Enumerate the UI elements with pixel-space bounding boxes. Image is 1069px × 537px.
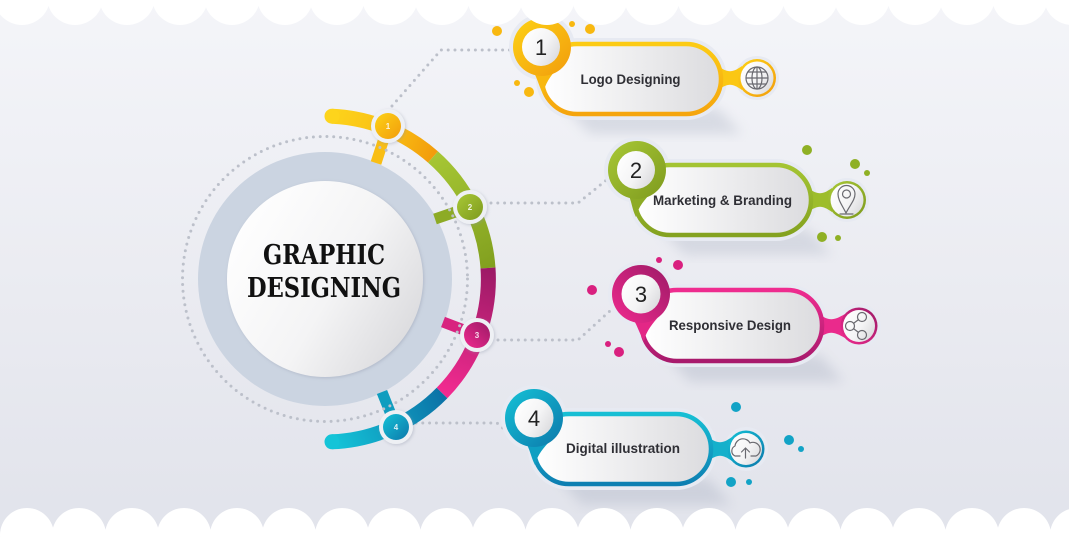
number badge xyxy=(505,389,563,447)
label: Marketing & Branding xyxy=(653,192,792,208)
bottom scalloped border xyxy=(0,508,1069,537)
number badge xyxy=(612,265,670,323)
node 3 xyxy=(460,318,494,352)
card shadow xyxy=(665,355,844,382)
card shadow xyxy=(660,229,832,255)
icon: share xyxy=(840,308,878,344)
badge tail xyxy=(626,191,653,217)
icon: map pin xyxy=(828,181,866,219)
card 3: responsive design: 3 xyxy=(635,282,647,307)
card 2: marketing and branding: 2 xyxy=(630,158,642,183)
node 4 xyxy=(379,410,413,444)
title: GRAPHIC xyxy=(263,240,385,271)
grey hub ring xyxy=(198,152,452,406)
badge tail xyxy=(531,68,558,94)
node 2: 2 xyxy=(468,203,473,212)
badge tail xyxy=(523,439,552,465)
number badge xyxy=(513,18,571,76)
label: Digital illustration xyxy=(566,440,680,456)
top scalloped border xyxy=(0,0,1069,25)
title: DESIGNING xyxy=(247,273,401,304)
card body xyxy=(635,165,811,235)
card body xyxy=(534,414,711,484)
card 3: responsive design xyxy=(587,257,881,382)
card 1: logo designing xyxy=(492,14,779,134)
label: Logo Designing xyxy=(580,71,680,87)
card 2: marketing and branding xyxy=(604,137,870,255)
card body xyxy=(542,44,721,114)
card 1: logo designing: 1 xyxy=(535,35,547,60)
node 3: 3 xyxy=(475,331,480,340)
card halo xyxy=(629,159,817,241)
card halo xyxy=(528,408,717,490)
connector to icon xyxy=(808,188,832,212)
badge tail xyxy=(630,315,660,341)
icon: globe xyxy=(738,59,776,97)
node 2 xyxy=(453,190,487,224)
node 4: 4 xyxy=(394,423,399,432)
title xyxy=(247,240,401,304)
accent dots xyxy=(587,257,683,357)
node 1 xyxy=(371,109,405,143)
central hub diagram xyxy=(182,109,494,449)
label: Responsive Design xyxy=(669,317,791,333)
accent dots xyxy=(802,145,870,242)
accent dots xyxy=(726,402,804,487)
card shadow xyxy=(565,108,742,134)
segmented outer arc xyxy=(324,109,488,449)
accent dots xyxy=(492,21,595,97)
card 4: digital illustration xyxy=(501,385,804,505)
card 4: digital illustration: 4 xyxy=(528,406,540,431)
connector to icon xyxy=(718,66,742,90)
card halo xyxy=(536,38,727,120)
dotted connector lines xyxy=(392,50,611,436)
card shadow xyxy=(557,478,732,505)
node 1: 1 xyxy=(386,122,391,131)
spokes xyxy=(376,126,477,427)
connector to icon xyxy=(819,314,845,338)
number badge xyxy=(608,141,666,199)
card halo xyxy=(636,284,828,367)
icon: cloud upload xyxy=(728,430,764,468)
white centre disc xyxy=(227,181,423,377)
dotted ring xyxy=(182,136,468,422)
connector to icon xyxy=(708,437,732,461)
card body xyxy=(642,290,822,361)
